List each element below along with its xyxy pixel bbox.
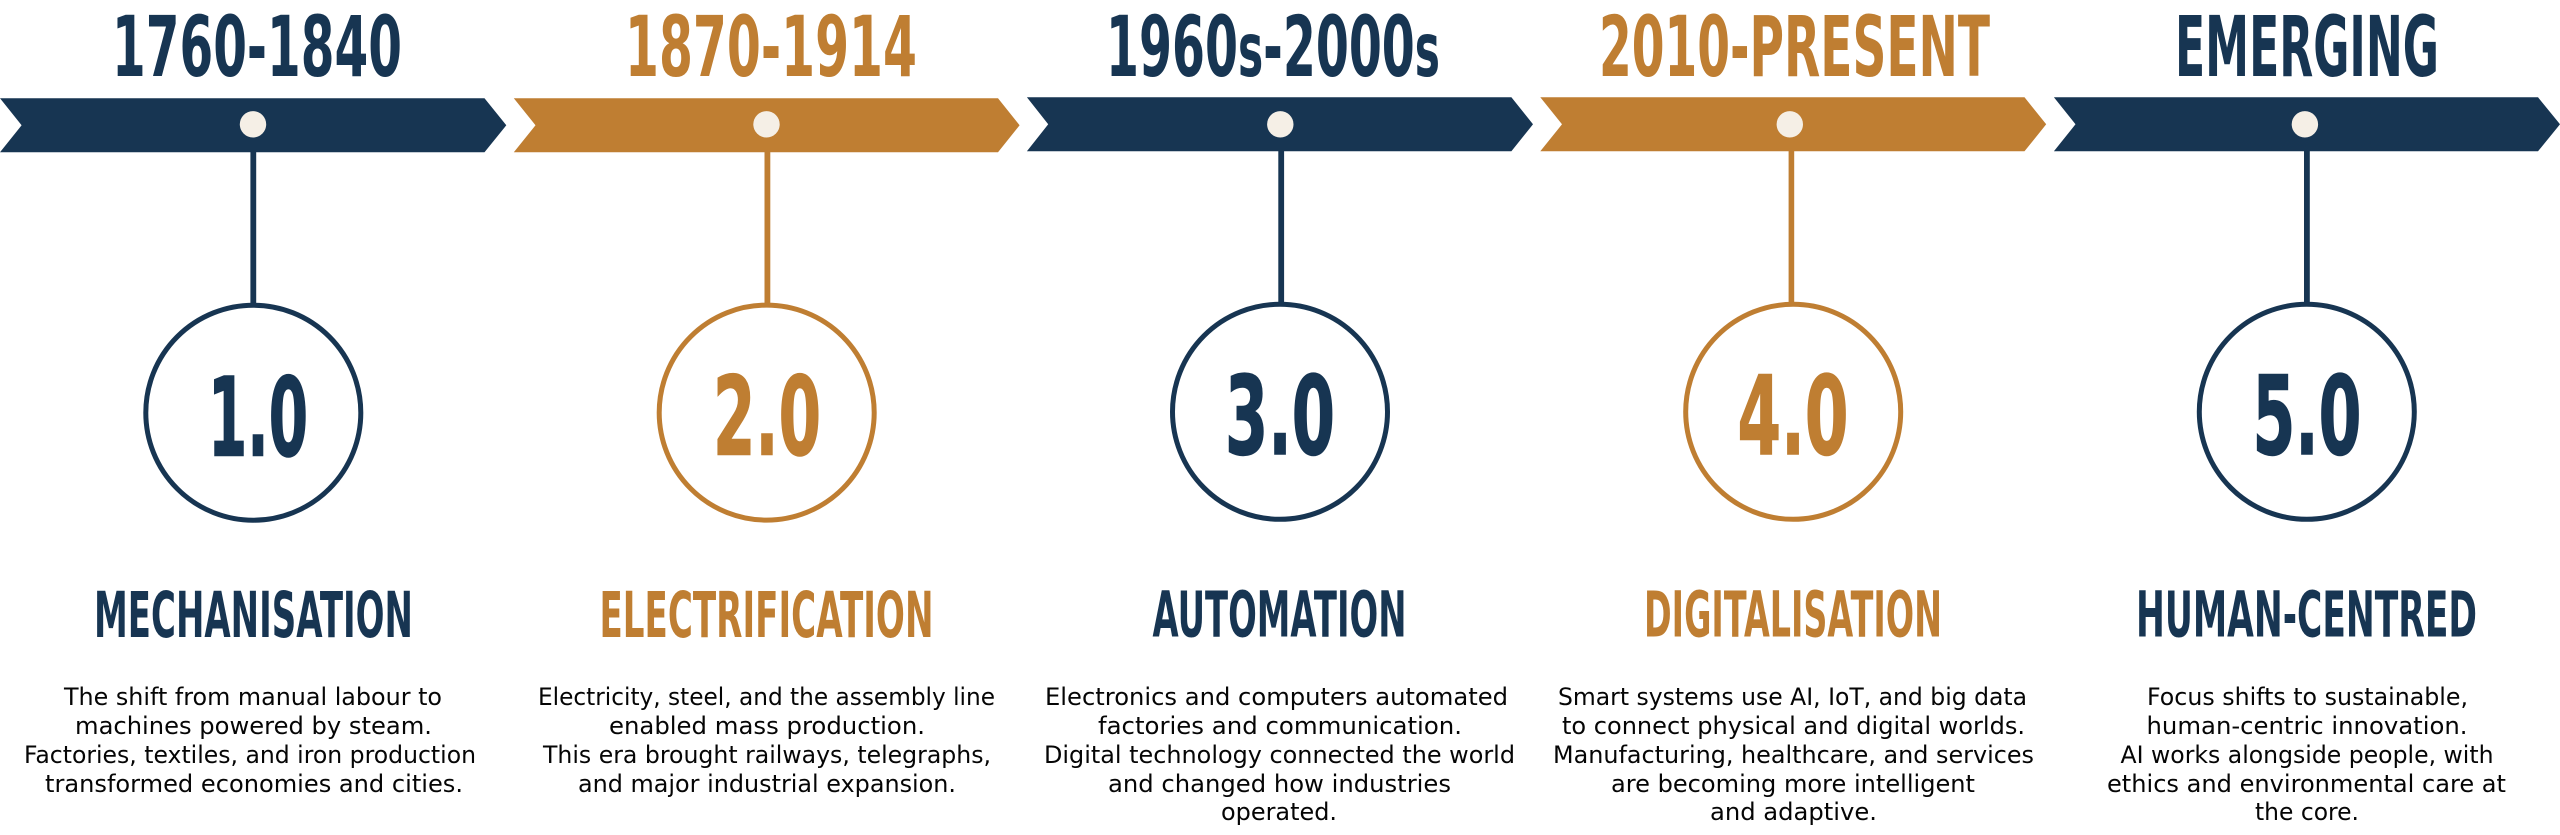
number: 5.0: 5.0 xyxy=(2252,353,2362,480)
heading: 1870-1914: 1870-1914 xyxy=(625,0,917,96)
column: Industry 2.0 xyxy=(514,0,1020,798)
description 3: and changed how industries xyxy=(1108,770,1451,798)
timeline dot 2 xyxy=(753,111,780,138)
description 3: Electronics and computers automated xyxy=(1045,683,1508,711)
connector line 3 xyxy=(1278,151,1284,303)
description 2: and major industrial expansion. xyxy=(578,770,956,798)
title: Electrification: ELECTRIFICATION xyxy=(600,579,934,652)
description 5 xyxy=(2107,683,2506,826)
arrow banner 2 xyxy=(514,98,1020,152)
timeline dot 5 xyxy=(2292,111,2318,138)
description 5: human-centric innovation. xyxy=(2146,712,2468,740)
title: Mechanisation: MECHANISATION xyxy=(94,579,413,652)
description 4 xyxy=(1553,683,2034,826)
description 2 xyxy=(538,683,995,798)
column: Industry 4.0 xyxy=(1540,0,2046,826)
description 3: operated. xyxy=(1221,798,1337,826)
arrow banner 3 xyxy=(1027,97,1533,151)
timeline dot 4 xyxy=(1777,111,1803,138)
description 5: Focus shifts to sustainable, xyxy=(2147,683,2468,711)
column: Industry 3.0 xyxy=(1027,0,1533,826)
circle badge 3 xyxy=(1172,304,1388,519)
timeline dot 1 xyxy=(240,111,266,138)
number: 2.0: 2.0 xyxy=(713,354,821,480)
description 4: Smart systems use AI, IoT, and big data xyxy=(1558,683,2027,711)
arrow banner 5 xyxy=(2054,97,2560,151)
description 4: Manufacturing, healthcare, and services xyxy=(1553,741,2034,769)
description 1: transformed economies and cities. xyxy=(45,770,463,798)
number: 4.0: 4.0 xyxy=(1738,353,1848,480)
heading: 1960s-2000s: 1960s-2000s xyxy=(1106,0,1440,96)
connector line 4 xyxy=(1789,151,1794,303)
connector line 5 xyxy=(2304,151,2310,303)
circle badge 2 xyxy=(659,305,874,520)
column: Industry 1.0 xyxy=(0,0,506,798)
description 1: machines powered by steam. xyxy=(75,712,432,740)
description 5: AI works alongside people, with xyxy=(2120,741,2494,769)
description 1 xyxy=(24,683,476,798)
column: Industry 5.0 xyxy=(2054,0,2560,826)
description 1: The shift from manual labour to xyxy=(63,683,442,711)
description 5: ethics and environmental care at xyxy=(2107,770,2506,798)
title: Digitalisation: DIGITALISATION xyxy=(1644,578,1942,652)
description 3: factories and communication. xyxy=(1098,712,1462,740)
arrow banner 4 xyxy=(1540,97,2046,151)
connector line 2 xyxy=(764,152,770,304)
title: Automation: AUTOMATION xyxy=(1152,578,1406,652)
circle badge 1 xyxy=(146,305,361,520)
circle badge 4 xyxy=(1686,304,1901,519)
description 4: are becoming more intelligent xyxy=(1611,770,1975,798)
description 1: Factories, textiles, and iron production xyxy=(24,741,476,769)
description 2: This era brought railways, telegraphs, xyxy=(542,741,991,769)
heading: 1760-1840: 1760-1840 xyxy=(112,0,402,96)
description 3: Digital technology connected the world xyxy=(1044,741,1515,769)
description 2: Electricity, steel, and the assembly line xyxy=(538,683,995,711)
circle badge 5 xyxy=(2199,304,2414,519)
timeline dot 3 xyxy=(1267,111,1294,138)
description 4: and adaptive. xyxy=(1710,798,1877,826)
number: 1.0: 1.0 xyxy=(208,354,308,482)
number: 3.0: 3.0 xyxy=(1225,353,1335,480)
arrow banner 1 xyxy=(0,98,506,152)
description 5: the core. xyxy=(2255,798,2359,826)
description 4: to connect physical and digital worlds. xyxy=(1562,712,2025,740)
description 2: enabled mass production. xyxy=(609,712,925,740)
description 3 xyxy=(1044,683,1515,826)
connector line 1 xyxy=(250,152,256,304)
heading: 2010-Present: 2010-PRESENT xyxy=(1599,0,1990,96)
